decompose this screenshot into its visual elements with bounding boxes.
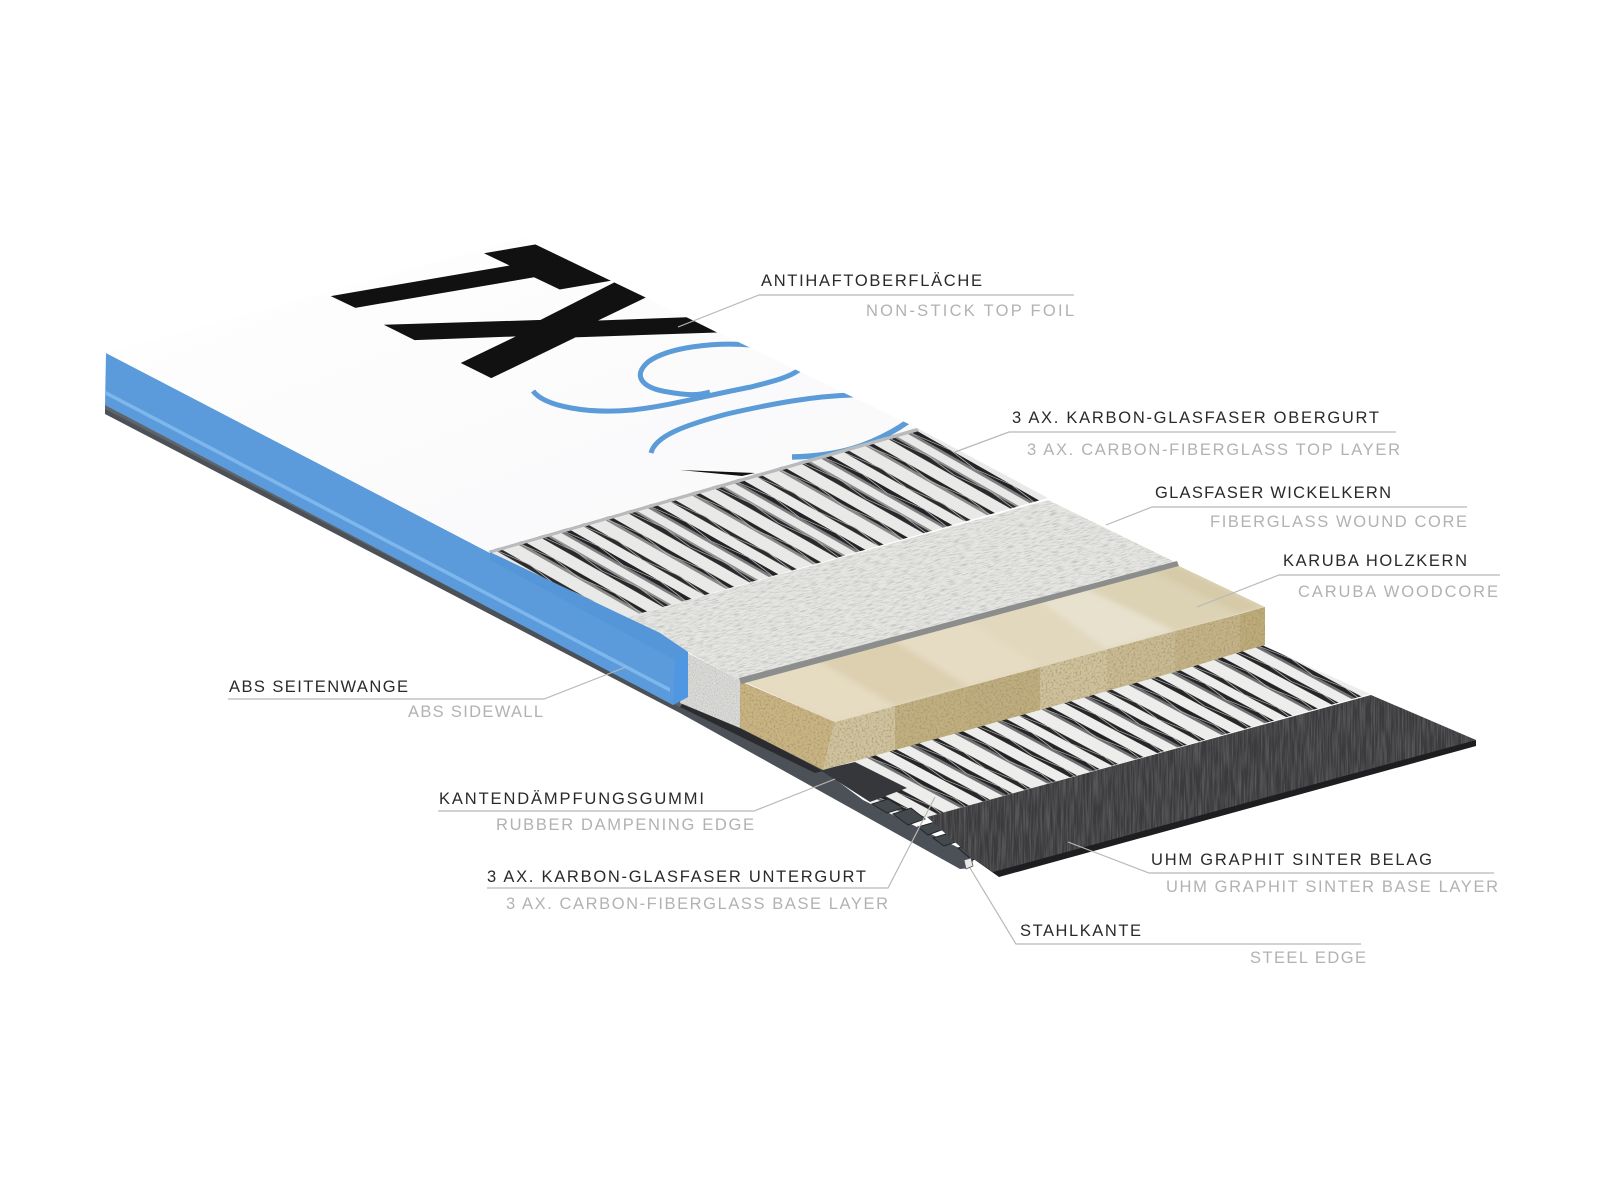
label: carbon fiberglass top layer xyxy=(955,409,1400,459)
wood core top face xyxy=(746,566,1265,722)
TX logo: X xyxy=(330,272,773,387)
label: rubber dampening edge: KANTENDÄMPFUNGSGUMMI xyxy=(439,790,704,808)
ABS sidewall xyxy=(105,353,688,705)
label: steel edge: STAHLKANTE xyxy=(1020,922,1141,940)
label: ABS sidewall: ABS SIDEWALL xyxy=(408,703,543,721)
steel edge teeth xyxy=(872,799,990,860)
graphite sinter base xyxy=(927,695,1476,877)
label: carbon fiberglass top layer: 3 AX. CARBON-FIBERGLASS TOP LAYER xyxy=(1027,441,1400,459)
label: fiberglass wound core: FIBERGLASS WOUND CORE xyxy=(1210,513,1467,531)
label: non-stick top foil: NON-STICK TOP FOIL xyxy=(866,302,1074,320)
label: steel edge: STEEL EDGE xyxy=(1250,949,1366,967)
wound core top face xyxy=(627,500,1174,680)
label: ABS sidewall xyxy=(228,667,626,721)
label: non-stick top foil xyxy=(678,272,1074,327)
non-stick top sheet xyxy=(106,238,917,551)
label: ABS sidewall: ABS SEITENWANGE xyxy=(229,678,408,696)
label: non-stick top foil: ANTIHAFTOBERFLÄCHE xyxy=(761,272,982,290)
upper carbon fiberglass layer xyxy=(488,428,1048,620)
steel edge and base strip xyxy=(105,405,975,869)
label: fiberglass wound core: GLASFASER WICKELKERN xyxy=(1155,484,1391,502)
thin black logo stroke xyxy=(680,470,755,476)
label: rubber dampening edge: RUBBER DAMPENING EDGE xyxy=(496,816,754,834)
wound core end face xyxy=(680,653,740,728)
layer separator xyxy=(739,561,1179,684)
label: carbon fiberglass base layer: 3 AX. CARBON-FIBERGLASS BASE LAYER xyxy=(506,895,888,913)
steel edge highlight xyxy=(964,858,973,869)
label: steel edge xyxy=(970,868,1366,967)
label: graphite sinter base layer xyxy=(1068,842,1498,896)
label: graphite sinter base layer: UHM GRAPHIT SINTER BASE LAYER xyxy=(1166,878,1498,896)
label: caruba woodcore xyxy=(1197,552,1500,607)
label: carbon fiberglass base layer: 3 AX. KARBON-GLASFASER UNTERGURT xyxy=(487,868,866,886)
top sheet cut edge xyxy=(488,428,919,553)
wood core front faces xyxy=(740,607,1265,770)
lower carbon fiberglass layer xyxy=(851,645,1370,820)
TX logo xyxy=(330,244,717,378)
label: carbon fiberglass base layer xyxy=(487,797,935,913)
ski cross-section illustration xyxy=(105,244,1476,877)
label: carbon fiberglass top layer: 3 AX. KARBON-GLASFASER OBERGURT xyxy=(1012,409,1379,427)
label: caruba woodcore: KARUBA HOLZKERN xyxy=(1283,552,1467,570)
label: rubber dampening edge xyxy=(438,779,835,834)
TX logo: T xyxy=(253,235,669,328)
blue logo swash xyxy=(533,344,909,457)
rubber dampening edge xyxy=(820,762,907,802)
label: graphite sinter base layer: UHM GRAPHIT SINTER BELAG xyxy=(1151,851,1432,869)
label: fiberglass wound core xyxy=(1106,484,1467,531)
label: caruba woodcore: CARUBA WOODCORE xyxy=(1298,583,1498,601)
